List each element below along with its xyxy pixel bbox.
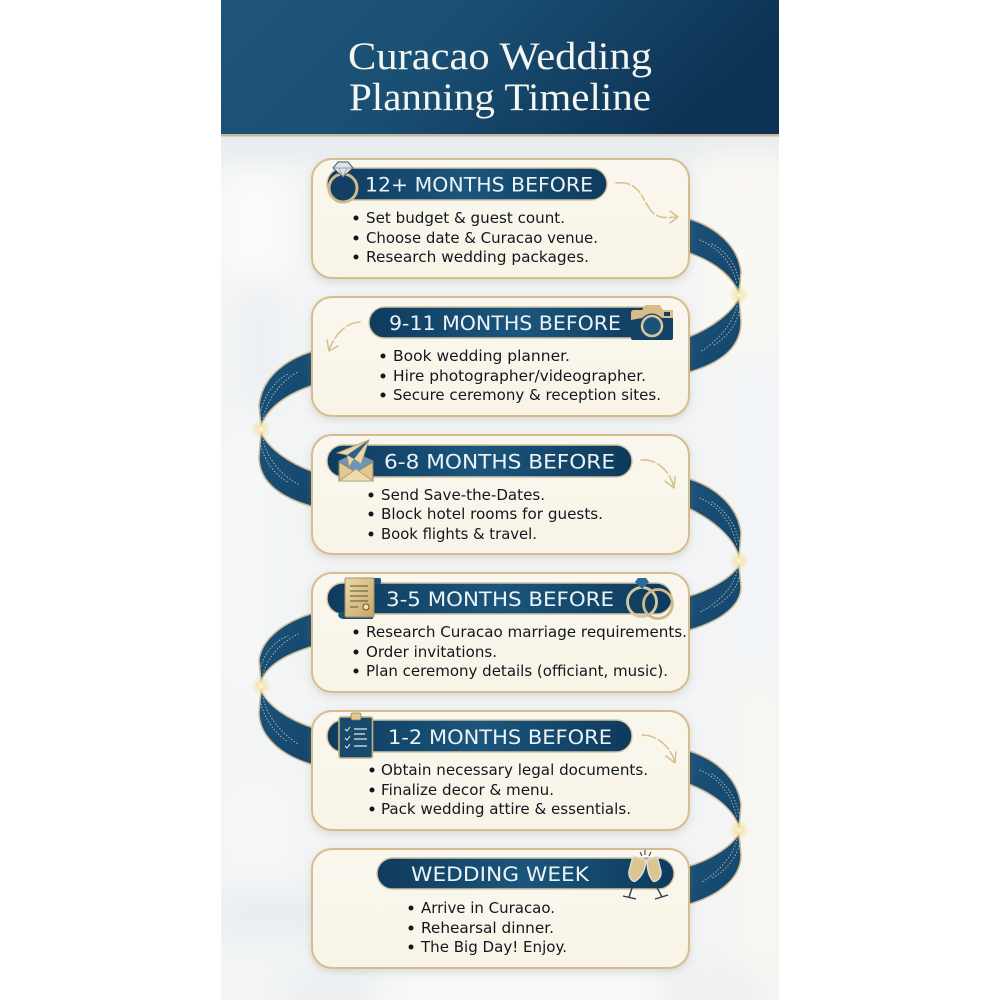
checklist: Research Curacao marriage requirements. [366, 623, 687, 641]
panel: 6-8 months before [312, 435, 689, 554]
arrow [642, 735, 676, 763]
heading pill [327, 168, 607, 200]
icon: camera [631, 305, 673, 340]
checklist [354, 623, 687, 680]
title: Planning Timeline [349, 76, 651, 119]
checklist: Secure ceremony & reception sites. [393, 386, 661, 404]
title [348, 35, 652, 119]
icon: champagne toast [623, 850, 668, 899]
panel: wedding week [312, 849, 689, 968]
panel: 1-2 months before [312, 711, 689, 830]
icon: certificate scroll [338, 578, 381, 619]
heading pill: 6-8 MONTHS BEFORE [384, 450, 615, 474]
connecting ribbons [251, 218, 749, 905]
ribbon: card 2 to card 3 [251, 351, 314, 507]
heading pill [327, 583, 672, 614]
heading pill: 1-2 MONTHS BEFORE [388, 726, 612, 749]
checklist: Send Save-the-Dates. [381, 486, 545, 504]
ribbon: card 5 to card 6 [686, 750, 749, 905]
checklist: Set budget & guest count. [366, 209, 565, 227]
heading pill [327, 720, 632, 752]
heading pill: 12+ MONTHS BEFORE [365, 174, 593, 196]
checklist [370, 761, 648, 818]
icon: diamond ring [329, 162, 357, 202]
checklist: Obtain necessary legal documents. [381, 761, 648, 779]
icon: envelope and paper plane [337, 440, 373, 481]
checklist: Book flights & travel. [381, 525, 537, 543]
checklist [354, 209, 598, 266]
checklist [380, 347, 661, 404]
arrow [616, 183, 678, 223]
heading pill: WEDDING WEEK [411, 863, 590, 886]
checklist: Pack wedding attire & essentials. [381, 800, 631, 818]
ribbon: card 1 to card 2 [686, 218, 749, 373]
checklist: Choose date & Curacao venue. [366, 229, 598, 247]
arrow [641, 460, 675, 488]
panel: 9-11 months before [312, 297, 689, 416]
checklist: Order invitations. [366, 643, 497, 661]
checklist: Hire photographer/videographer. [393, 367, 646, 385]
panel: 12+ months before [312, 159, 689, 278]
background panel [200, 120, 800, 1000]
checklist: Block hotel rooms for guests. [381, 505, 603, 523]
ribbon: card 4 to card 5 [251, 613, 314, 765]
checklist: Plan ceremony details (officiant, music). [366, 662, 668, 680]
heading pill [377, 858, 674, 889]
checklist: Research wedding packages. [366, 248, 589, 266]
panel: 3-5 months before [312, 573, 689, 692]
heading pill: 9-11 MONTHS BEFORE [389, 312, 621, 335]
checklist: Book wedding planner. [393, 347, 570, 365]
checklist [368, 486, 603, 543]
ribbon: card 3 to card 4 [686, 478, 749, 631]
heading pill [369, 307, 669, 338]
heading pill [327, 445, 632, 477]
title: Curacao Wedding [348, 35, 652, 78]
checklist: The Big Day! Enjoy. [420, 938, 567, 956]
checklist: Finalize decor & menu. [381, 781, 554, 799]
checklist: Arrive in Curacao. [421, 899, 555, 917]
arrow [327, 322, 360, 351]
icon: clipboard checklist [339, 713, 372, 758]
checklist [408, 899, 567, 956]
checklist: Rehearsal dinner. [421, 919, 554, 937]
heading pill: 3-5 MONTHS BEFORE [386, 588, 614, 611]
header band [221, 0, 779, 136]
icon: wedding rings [628, 578, 672, 618]
